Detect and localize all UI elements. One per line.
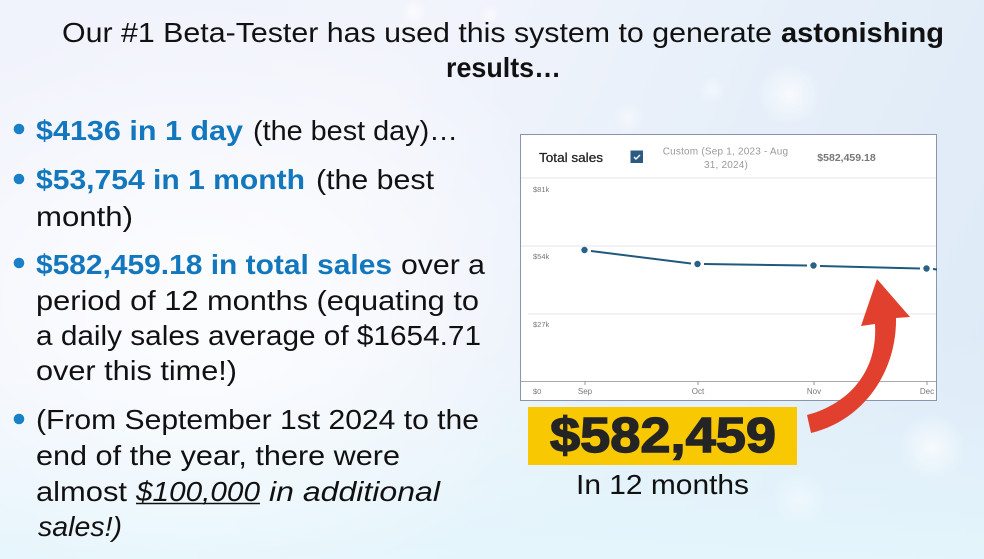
- chart date range: Custom (Sep 1, 2023 - Aug: [663, 146, 788, 158]
- x axis labels: [578, 381, 934, 396]
- title: results…: [446, 52, 561, 83]
- chart total value: $582,459.18: [817, 152, 876, 164]
- bullet: additional sales: [14, 404, 479, 542]
- arrow: [807, 279, 910, 433]
- bullet: best day: [14, 115, 458, 146]
- y axis labels: [533, 185, 550, 396]
- title: Our #1 Beta-Tester has used this system to generate: [62, 17, 772, 48]
- bullet: additional sales: sales!): [38, 511, 122, 542]
- bullet: best month: month): [36, 201, 133, 232]
- title: [62, 17, 944, 83]
- sales chart screenshot: [520, 134, 937, 400]
- icon: checkbox: [630, 150, 643, 163]
- y axis labels: $54k: [533, 252, 550, 261]
- bullet: best month: [14, 164, 434, 232]
- bullet: total sales: a daily sales average of $1654.71: [36, 320, 481, 351]
- bullet: additional sales: (From September 1st 2024 to the: [36, 404, 479, 435]
- bullet: additional sales: in additional: [269, 476, 441, 507]
- x axis labels: Oct: [692, 387, 705, 396]
- bullet: additional sales: end of the year, there were: [36, 440, 400, 471]
- chart date range: 31, 2024): [704, 160, 748, 171]
- x axis labels: Nov: [807, 387, 821, 396]
- y axis labels: $27k: [533, 320, 550, 329]
- bullet: total sales: [14, 249, 485, 386]
- y axis labels: $0: [533, 387, 541, 396]
- bullet: additional sales: $100,000: [135, 476, 260, 507]
- chart date range: [663, 146, 788, 171]
- highlighted total: $582,459: [550, 409, 776, 463]
- bullet: total sales: over this time!): [36, 355, 237, 386]
- chart header: total sales: Total sales: [539, 150, 604, 165]
- x axis labels: Sep: [578, 387, 593, 396]
- y axis labels: $81k: [533, 185, 550, 194]
- bullet: additional sales: almost: [36, 476, 127, 507]
- title: astonishing: [781, 17, 944, 48]
- line series: [581, 247, 937, 272]
- bullet: total sales: $582,459.18 in total sales: [36, 249, 392, 280]
- bullet: best day: (the best day)…: [253, 115, 458, 146]
- bullet: best month: (the best: [316, 164, 434, 195]
- bullet list: [14, 115, 485, 542]
- bullet: total sales: period of 12 months (equating to: [36, 285, 479, 316]
- caption: In 12 months: [576, 469, 749, 500]
- bullet: best month: $53,754 in 1 month: [36, 164, 305, 195]
- x axis labels: Dec: [920, 387, 934, 396]
- bullet: total sales: over a: [401, 249, 485, 280]
- bullet: best day: $4136 in 1 day: [36, 115, 243, 146]
